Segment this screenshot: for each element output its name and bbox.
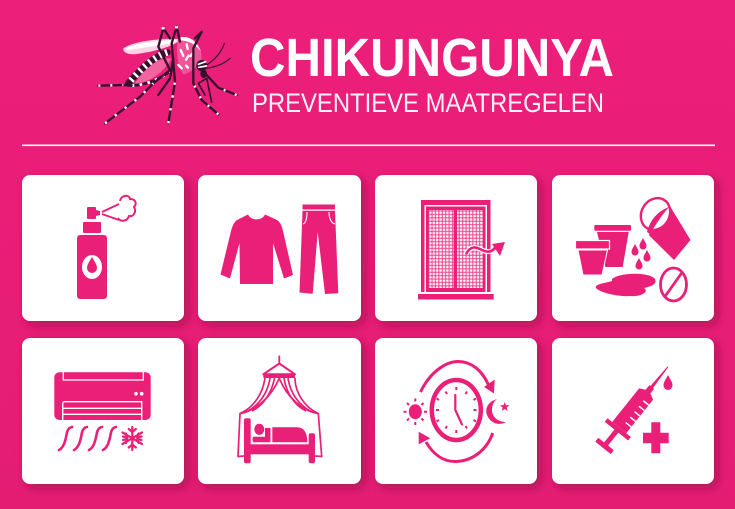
- icon: long-sleeved shirt: [220, 214, 293, 284]
- panel: day and night protection: [375, 338, 537, 484]
- panel: air conditioning: [22, 338, 184, 484]
- icon: long trousers: [300, 204, 338, 294]
- icon: window with mesh: [418, 200, 505, 300]
- panel: repellent spray: [22, 175, 184, 321]
- icon: sun: [404, 398, 427, 425]
- subtitle: PREVENTIEVE MAATREGELEN: [252, 88, 604, 118]
- icon: prohibition sign: [660, 268, 686, 301]
- arrow: day to night: [420, 362, 495, 394]
- icon: pots, bucket and puddle: [576, 193, 690, 301]
- panel: window screens: [375, 175, 537, 321]
- icon: snowflake: [122, 427, 142, 450]
- icon: moon and star: [486, 399, 510, 424]
- mosquito belly: [135, 58, 172, 83]
- panel: empty standing water: [552, 175, 714, 321]
- mosquito wing: [123, 39, 180, 54]
- mosquito thorax: [177, 37, 202, 74]
- mosquito legs: [98, 27, 237, 123]
- mosquito leg bands: [98, 27, 237, 123]
- icon: drop: [664, 375, 672, 390]
- icon: clock: [432, 380, 481, 440]
- icon: syringe: [591, 357, 680, 457]
- icon: air conditioner: [54, 372, 151, 420]
- panel: mosquito net over bed: [198, 338, 361, 484]
- icon: plus: [643, 422, 669, 453]
- icon: air waves: [59, 427, 116, 450]
- icon: mosquito: [98, 27, 237, 123]
- panel: vaccination: [552, 338, 714, 484]
- icon: spray bottle: [77, 196, 136, 299]
- panel: covering clothes: [198, 175, 361, 321]
- icon: person in bed: [244, 418, 315, 463]
- arrow through mesh: [466, 242, 505, 256]
- arrow: night to day: [419, 432, 493, 462]
- mosquito head: [196, 60, 207, 78]
- title: CHIKUNGUNYA: [250, 28, 614, 88]
- mosquito abdomen: [128, 52, 172, 86]
- icon: canopy net: [238, 356, 322, 456]
